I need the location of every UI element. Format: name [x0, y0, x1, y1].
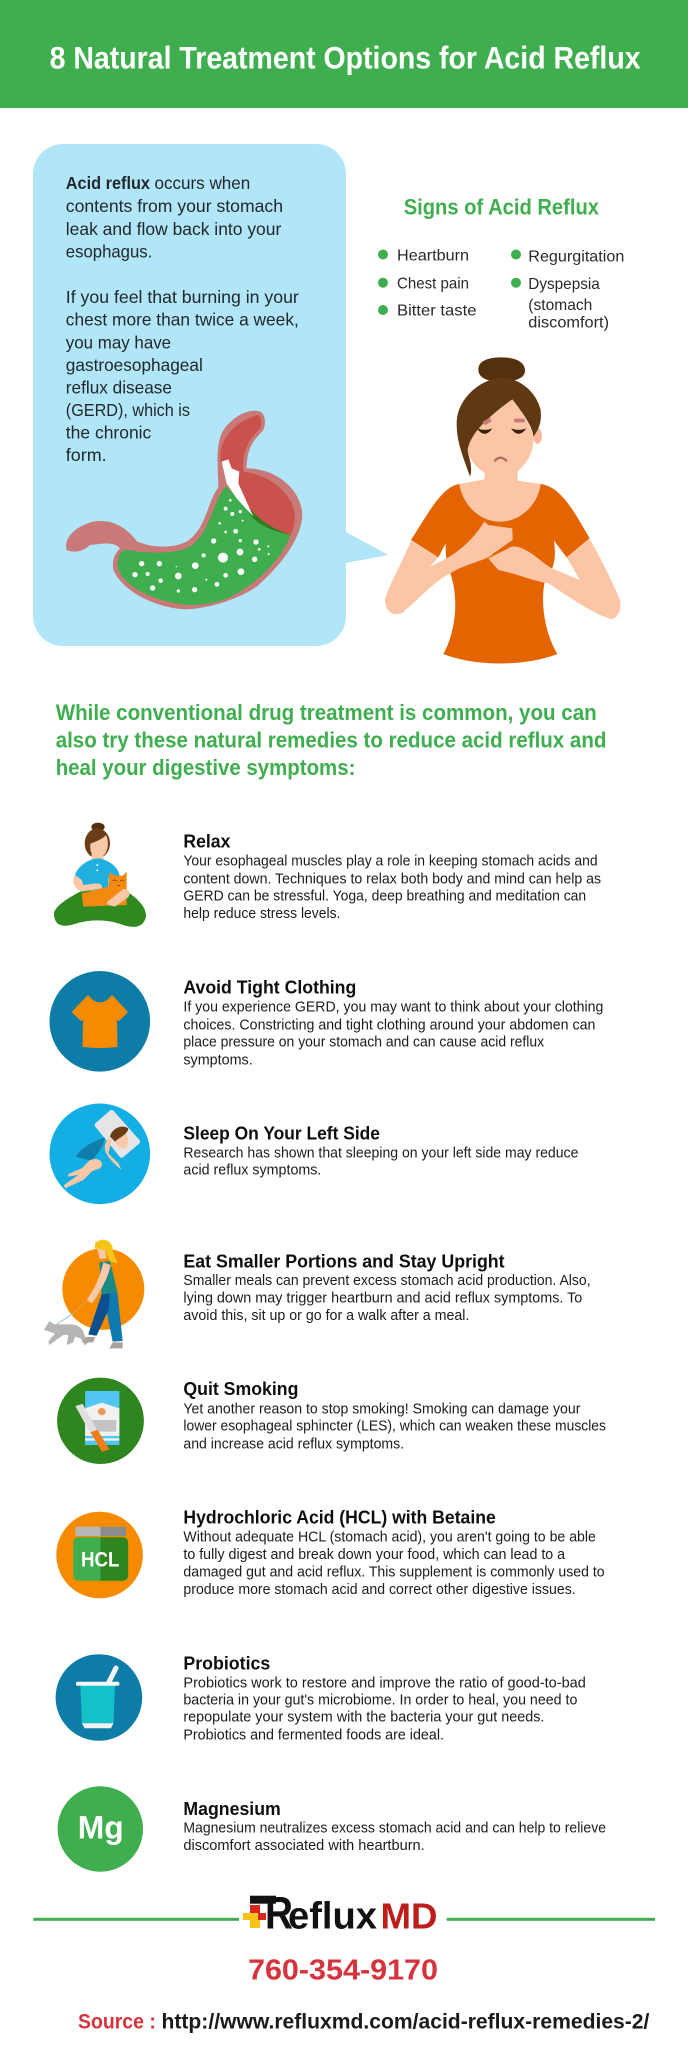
remedy: magnesium	[183, 1798, 606, 1854]
acid reflux explanation text: If you feel that burning in your	[66, 287, 299, 307]
acid reflux explanation text: gastroesophageal	[66, 355, 203, 375]
remedy: probiotics: Probiotics work to restore and improve the ratio of good-to-bad	[183, 1676, 586, 1692]
speech bubble panel	[33, 144, 388, 646]
logo: RefluxMD: MD	[380, 1895, 438, 1936]
remedy: quit smoking	[183, 1378, 606, 1452]
icon: cigarette pack	[57, 1378, 144, 1464]
acid reflux explanation text: the chronic	[66, 422, 152, 442]
acid reflux explanation text: you may have	[66, 332, 171, 352]
remedy: avoid tight clothing: Avoid Tight Clothing	[183, 976, 356, 997]
remedy: sleep on your left side	[183, 1122, 578, 1179]
logo: RefluxMD: eflux	[288, 1895, 377, 1937]
icon: yogurt cup	[56, 1654, 142, 1741]
illustration: stomach	[66, 411, 302, 609]
acid reflux explanation text: occurs when	[154, 173, 250, 193]
remedy: relax: help reduce stress levels.	[183, 906, 340, 922]
remedy: hydrochloric acid with betaine: produce more stomach acid and correct other digestive issues.	[183, 1582, 576, 1598]
remedy: hydrochloric acid with betaine: damaged gut and acid reflux. This supplement is commonly used to	[183, 1565, 605, 1581]
intro heading for remedies: also try these natural remedies to reduce acid reflux and	[56, 727, 606, 752]
list: signs of acid reflux	[378, 248, 624, 332]
remedy: quit smoking: Yet another reason to stop smoking! Smoking can damage your	[183, 1401, 581, 1417]
list: signs of acid reflux: Dyspepsia	[528, 276, 600, 293]
acid reflux explanation text: form.	[66, 445, 107, 465]
remedy: sleep on your left side: acid reflux symptoms.	[183, 1163, 321, 1179]
icon: t-shirt	[50, 971, 150, 1072]
remedy: avoid tight clothing: If you experience GERD, you may want to think about your clothing	[183, 1000, 603, 1016]
icon: HCL supplement jar	[56, 1512, 143, 1598]
icon: magnesium	[58, 1786, 143, 1872]
remedy: magnesium: Magnesium neutralizes excess stomach acid and can help to relieve	[183, 1821, 606, 1837]
remedy: avoid tight clothing	[183, 976, 603, 1068]
icon: woman walking dog	[44, 1240, 144, 1348]
logo: RefluxMD	[243, 1887, 438, 1938]
title banner	[0, 0, 688, 108]
source line: Source :	[78, 2010, 156, 2033]
intro heading for remedies	[56, 700, 606, 780]
phone number: 760-354-9170	[248, 1954, 438, 1986]
remedy: magnesium: Magnesium	[183, 1798, 281, 1819]
source line: http://www.refluxmd.com/acid-reflux-remedies-2/	[162, 2010, 650, 2033]
remedy: relax: Relax	[183, 830, 231, 851]
illustration: woman with heartburn	[385, 357, 621, 663]
remedy: avoid tight clothing: symptoms.	[183, 1052, 253, 1068]
remedy: quit smoking: lower esophageal sphincter (LES), which can weaken these muscles	[183, 1419, 606, 1435]
acid reflux explanation text: (GERD), which is	[66, 400, 190, 420]
remedy: eat smaller portions and stay upright: lying down may trigger heartburn and acid reflux symptoms. To	[183, 1291, 582, 1307]
list: signs of acid reflux: (stomach	[528, 297, 592, 314]
remedy: hydrochloric acid with betaine: Hydrochloric Acid (HCL) with Betaine	[183, 1506, 496, 1527]
acid reflux explanation text: contents from your stomach	[66, 196, 283, 216]
remedy: probiotics: bacteria in your gut's microbiome. In order to heal, you need to	[183, 1693, 577, 1709]
list: signs of acid reflux: Chest pain	[397, 275, 469, 292]
remedy: eat smaller portions and stay upright: avoid this, sit up or go for a walk after a meal.	[183, 1308, 469, 1324]
acid reflux explanation text: Acid reflux	[66, 173, 150, 193]
title banner: 8 Natural Treatment Options for Acid Reflux	[50, 39, 641, 75]
heading: signs of acid reflux: Signs of Acid Reflux	[404, 194, 600, 219]
intro heading for remedies: While conventional drug treatment is common, you can	[56, 700, 597, 725]
acid reflux explanation text: reflux disease	[66, 378, 172, 398]
remedy: probiotics: repopulate your system with the bacteria your gut needs.	[183, 1710, 544, 1726]
remedy: avoid tight clothing: place pressure on your stomach and can cause acid reflux	[183, 1035, 545, 1051]
icon: magnesium: Mg	[78, 1809, 124, 1845]
remedy: hydrochloric acid with betaine: Without adequate HCL (stomach acid), you aren't going to be able	[183, 1530, 596, 1546]
remedy: relax	[183, 830, 601, 922]
acid reflux explanation text: esophagus.	[66, 242, 152, 262]
acid reflux explanation text	[66, 173, 299, 465]
remedy: relax: Your esophageal muscles play a role in keeping stomach acids and	[183, 854, 598, 870]
remedy: eat smaller portions and stay upright: Eat Smaller Portions and Stay Upright	[183, 1250, 505, 1271]
remedy: eat smaller portions and stay upright: Smaller meals can prevent excess stomach acid production. Also,	[183, 1273, 591, 1289]
remedy: quit smoking: Quit Smoking	[183, 1378, 298, 1399]
remedy: hydrochloric acid with betaine: to fully digest and break down your food, which can lead to a	[183, 1547, 566, 1563]
remedy: relax: GERD can be stressful. Yoga, deep breathing and meditation can	[183, 889, 586, 905]
remedy: sleep on your left side: Sleep On Your Left Side	[183, 1122, 380, 1143]
remedy: probiotics: Probiotics	[183, 1652, 270, 1673]
icon: woman meditating with cat	[54, 823, 146, 927]
remedy: avoid tight clothing: choices. Constricting and tight clothing around your abdomen can	[183, 1017, 595, 1033]
list: signs of acid reflux: Heartburn	[397, 248, 469, 265]
remedy: hydrochloric acid with betaine	[183, 1506, 605, 1598]
remedy: probiotics: Probiotics and fermented foods are ideal.	[183, 1727, 444, 1743]
remedy: eat smaller portions and stay upright	[183, 1250, 591, 1324]
remedy: relax: content down. Techniques to relax both body and mind can help as	[183, 871, 601, 887]
list: signs of acid reflux: Bitter taste	[397, 303, 477, 320]
icon: HCL supplement jar: HCL	[81, 1549, 120, 1572]
remedy: magnesium: discomfort associated with heartburn.	[183, 1838, 425, 1854]
list: signs of acid reflux: discomfort)	[528, 315, 609, 332]
logo: RefluxMD: R	[265, 1887, 293, 1938]
remedy: quit smoking: and increase acid reflux symptoms.	[183, 1436, 404, 1452]
icon: sleeping on left side	[50, 1104, 150, 1204]
acid reflux explanation text: leak and flow back into your	[66, 219, 281, 239]
remedy: sleep on your left side: Research has shown that sleeping on your left side may reduce	[183, 1145, 578, 1161]
remedy: probiotics	[183, 1652, 586, 1743]
list: signs of acid reflux: Regurgitation	[528, 249, 624, 266]
intro heading for remedies: heal your digestive symptoms:	[56, 755, 355, 780]
acid reflux explanation text: chest more than twice a week,	[66, 310, 299, 330]
